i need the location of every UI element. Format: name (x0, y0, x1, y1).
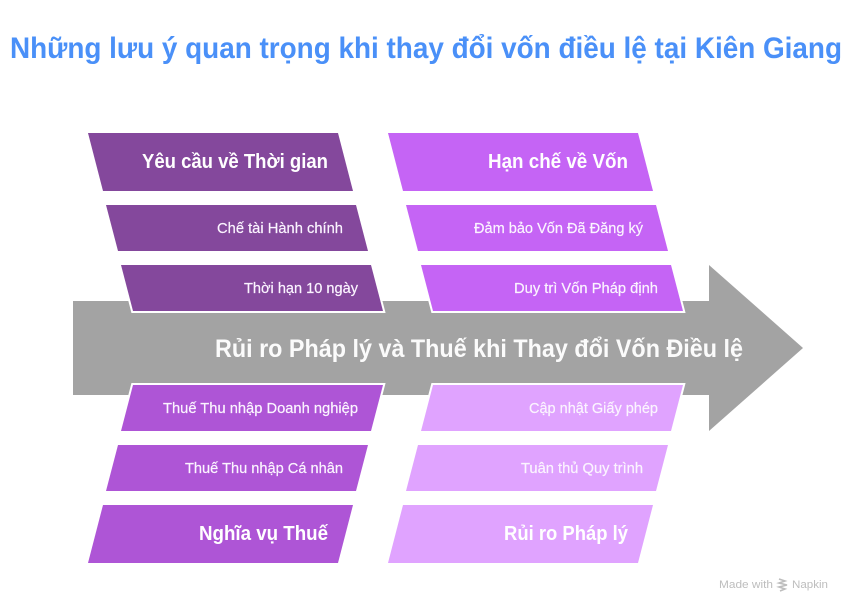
item: corporate income tax (121, 385, 383, 431)
item: process compliance (406, 445, 668, 491)
heading: time requirements: Yêu cầu về Thời gian (142, 150, 328, 173)
item: administrative penalties (106, 205, 368, 251)
heading: legal risks (388, 505, 653, 563)
panel: time requirements (88, 133, 383, 311)
heading: capital restrictions (388, 133, 653, 191)
panel: legal risks (388, 385, 683, 563)
item: 10-day deadline (121, 265, 383, 311)
heading: tax obligations (88, 505, 353, 563)
item: corporate income tax: Thuế Thu nhập Doanh nghiệp (163, 400, 358, 417)
heading: capital restrictions: Hạn chế về Vốn (488, 150, 628, 173)
item: update licence (421, 385, 683, 431)
watermark: Made with (719, 579, 773, 591)
item: personal income tax (106, 445, 368, 491)
central arrow (73, 265, 803, 431)
item: legal capital: Duy trì Vốn Pháp định (514, 280, 658, 297)
heading: legal risks: Rủi ro Pháp lý (504, 522, 629, 545)
item: 10-day deadline: Thời hạn 10 ngày (244, 280, 358, 297)
panel: tax obligations (88, 385, 383, 563)
watermark (719, 579, 828, 591)
panel: capital restrictions (388, 133, 683, 311)
arrow label: Rủi ro Pháp lý và Thuế khi Thay đổi Vốn Điều lệ (215, 335, 743, 363)
item: update licence: Cập nhật Giấy phép (529, 400, 658, 417)
item: legal capital (421, 265, 683, 311)
item: registered capital (406, 205, 668, 251)
item: personal income tax: Thuế Thu nhập Cá nhân (185, 460, 343, 477)
item: registered capital: Đảm bảo Vốn Đã Đăng ký (474, 220, 643, 237)
heading: tax obligations: Nghĩa vụ Thuế (199, 522, 329, 545)
item: administrative penalties: Chế tài Hành chính (217, 220, 343, 237)
icon: napkin logo (779, 579, 787, 591)
heading: time requirements (88, 133, 353, 191)
item: process compliance: Tuân thủ Quy trình (521, 460, 643, 477)
watermark: Napkin (792, 579, 828, 591)
